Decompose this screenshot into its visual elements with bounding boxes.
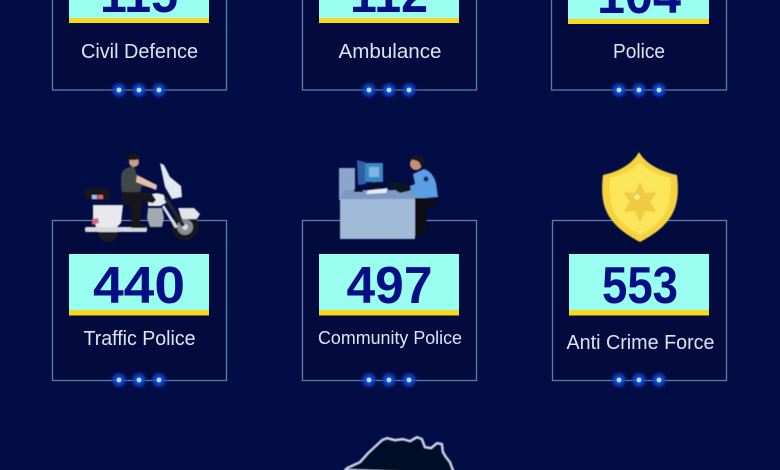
icon: gold shield badge xyxy=(602,152,678,242)
card: Police 104 xyxy=(552,0,726,99)
map outline xyxy=(345,437,456,470)
icon: community police officer at desk xyxy=(339,155,438,239)
card: Community Police 497 xyxy=(302,220,476,389)
card: Traffic Police 440 xyxy=(52,220,226,389)
card: Anti Crime Force 553: Anti Crime Force xyxy=(566,332,714,354)
icon: police motorcycle xyxy=(85,153,200,242)
card: Traffic Police 440: 440 xyxy=(93,257,185,315)
card: Traffic Police 440: Traffic Police xyxy=(84,328,196,350)
card: Ambulance 112 xyxy=(302,0,476,99)
card: Community Police 497: 497 xyxy=(346,257,432,315)
card: Community Police 497: Community Police xyxy=(318,328,462,348)
card: Police 104: Police xyxy=(613,41,665,63)
card: Ambulance 112: Ambulance xyxy=(338,41,442,63)
card: Civil Defence 115: Civil Defence xyxy=(81,41,198,63)
card: Anti Crime Force 553 xyxy=(552,220,726,389)
card: Anti Crime Force 553: 553 xyxy=(602,257,678,315)
card: Civil Defence 115 xyxy=(52,0,226,99)
